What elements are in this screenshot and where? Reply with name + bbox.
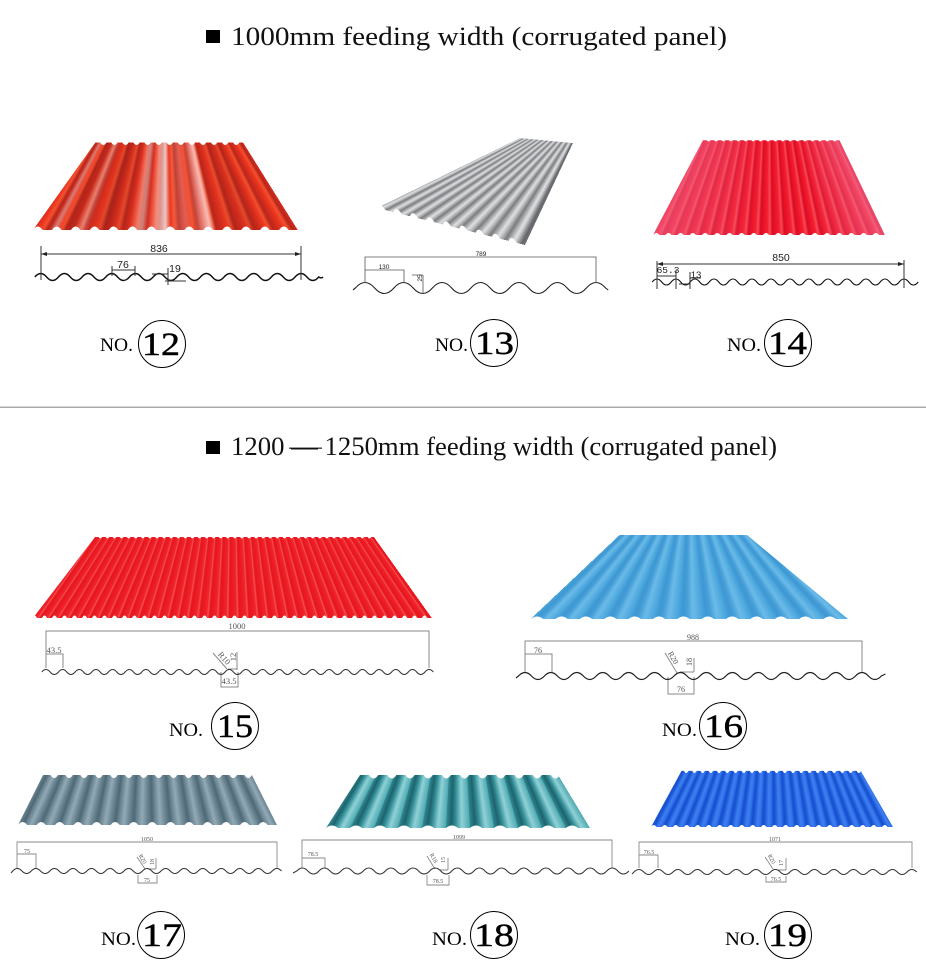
- label: No.19 badge: 19: [768, 918, 807, 954]
- label: No.17 badge: 17: [142, 918, 182, 954]
- panel photo: No.13 galvanized silver sheet: [378, 138, 573, 245]
- profile drawing: No.18: 78.5: [433, 879, 443, 885]
- profile drawing: No.16: 18: [685, 658, 694, 666]
- profile drawing: No.18: R18: [428, 853, 438, 864]
- label: No.17 badge: NO.: [101, 929, 136, 950]
- label: No.18 badge: NO.: [432, 929, 467, 950]
- profile drawing: No.19: R20: [766, 854, 776, 865]
- profile drawing: No.17: 18: [150, 859, 156, 865]
- label: No.14 badge: NO.: [727, 335, 761, 356]
- profile drawing: No.15: 43.5: [222, 676, 236, 686]
- profile drawing: No.12: 19: [169, 263, 181, 275]
- profile drawing: No.12: 836: [150, 243, 168, 255]
- profile drawing: No.16: [516, 633, 885, 694]
- profile drawing: No.13: 25: [417, 274, 424, 282]
- profile drawing: No.16: 76: [677, 685, 685, 694]
- panel photo: No.14 bright red sheet: [653, 140, 885, 235]
- profile drawing: No.15: 1000: [228, 621, 246, 631]
- profile drawing: No.17: 75: [24, 849, 30, 855]
- label: No.12 badge: [100, 320, 186, 368]
- profile drawing: No.17: [11, 837, 282, 884]
- label: No.12 badge: NO.: [100, 335, 133, 356]
- profile drawing: No.13: 789: [476, 251, 487, 258]
- panel photo: No.19 royal blue sheet: [651, 770, 893, 827]
- profile drawing: No.19: 17: [779, 860, 785, 866]
- profile drawing: No.15: [42, 621, 433, 687]
- profile drawing: No.12: 76: [117, 259, 129, 271]
- panel photo: No.15 red sheet: [34, 537, 432, 618]
- profile drawing: No.19: 76.5: [644, 850, 654, 856]
- label: No.19 badge: NO.: [725, 929, 760, 950]
- profile drawing: No.15: 43.5: [47, 645, 61, 655]
- profile drawing: No.18: 78.5: [308, 852, 318, 858]
- label: No.14 badge: [727, 320, 812, 366]
- profile drawing: No.15: 12: [228, 653, 238, 661]
- label: No.13 badge: NO.: [435, 335, 468, 356]
- profile drawing: No.18: 15: [441, 857, 447, 863]
- panel photo: No.17 slate grey sheet: [18, 775, 277, 825]
- profile drawing: No.18: 1099: [453, 835, 465, 841]
- panel photo: No.18 teal sheet: [326, 775, 590, 828]
- profile drawing: No.19: 1071: [769, 837, 781, 843]
- profile drawing: No.19: 76.5: [771, 877, 781, 883]
- profile drawing: No.16: 76: [534, 646, 542, 655]
- label: No.16 badge: NO.: [662, 720, 697, 741]
- profile drawing: No.17: 75: [144, 878, 150, 884]
- label: No.18 badge: [432, 912, 518, 958]
- profile drawing: No.17: 1050: [141, 837, 153, 843]
- label: No.16 badge: 16: [704, 709, 743, 745]
- label: No.13 badge: [435, 320, 518, 366]
- label: No.15 badge: NO.: [169, 720, 203, 741]
- icon: black square bullet: [206, 441, 220, 454]
- panel photo: No.16 sky blue sheet: [531, 535, 848, 619]
- profile drawing: No.19: [632, 837, 917, 883]
- profile drawing: No.14: [652, 252, 918, 289]
- label: No.15 badge: 15: [217, 709, 253, 745]
- profile drawing: No.13: 130: [379, 264, 390, 271]
- profile drawing: No.14: 13: [691, 270, 701, 281]
- profile drawing: No.17: R20: [137, 854, 147, 865]
- label: No.18 badge: 18: [474, 918, 514, 954]
- label: No.15 badge: [169, 702, 258, 750]
- icon: black square bullet: [206, 30, 220, 43]
- heading: 1000mm feeding width: 1000mm feeding width (corrugated panel): [231, 22, 727, 51]
- label: No.19 badge: [725, 912, 812, 958]
- profile drawing: No.14: 850: [772, 252, 790, 264]
- label: No.17 badge: [101, 912, 184, 958]
- profile drawing: No.16: R20: [666, 650, 680, 666]
- profile drawing: No.13: [353, 251, 608, 294]
- label: No.14 badge: 14: [768, 326, 807, 362]
- profile drawing: No.12: [35, 243, 323, 285]
- panel photo: No.12 red corrugated sheet: [34, 142, 298, 230]
- profile drawing: No.14: 65.3: [657, 265, 680, 276]
- label: No.12 badge: 12: [142, 327, 180, 363]
- profile drawing: No.18: [293, 835, 629, 885]
- profile drawing: No.16: 988: [687, 633, 699, 642]
- heading: 1200-1250mm feeding width: 1200 — 1250mm feeding width (corrugated panel): [231, 432, 777, 461]
- profile drawing: No.15: R10: [216, 649, 233, 667]
- label: No.16 badge: [662, 702, 746, 750]
- label: No.13 badge: 13: [475, 326, 514, 362]
